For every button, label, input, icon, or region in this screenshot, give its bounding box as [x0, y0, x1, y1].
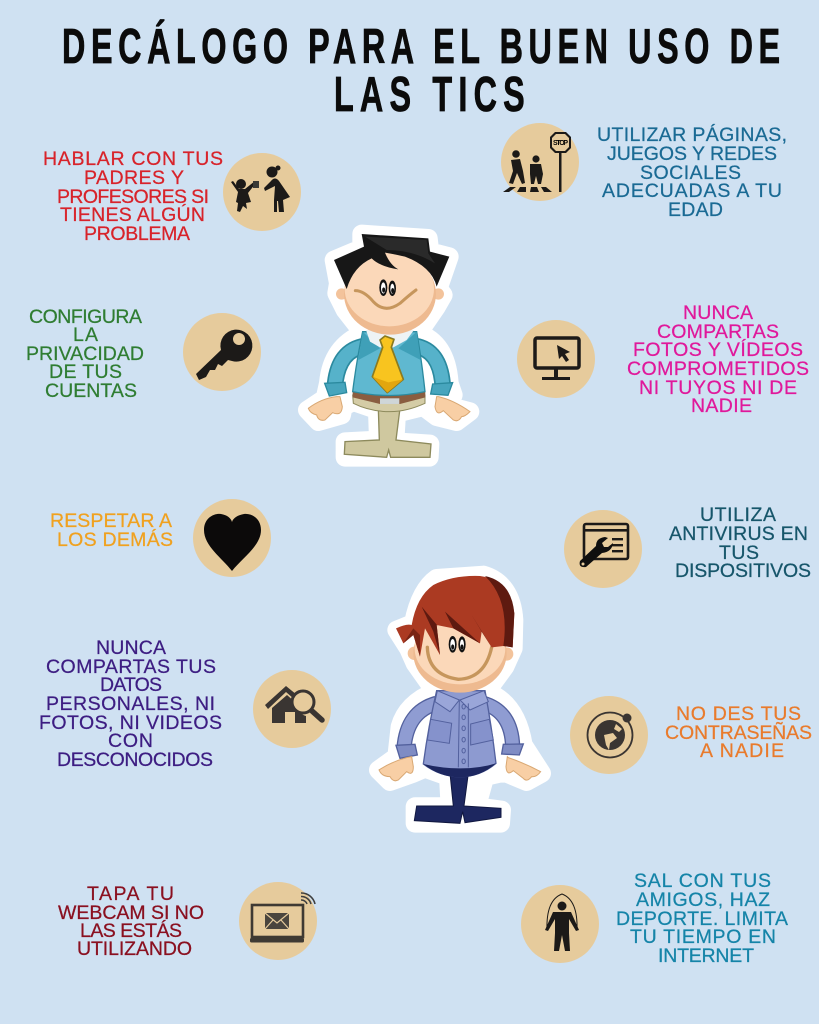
text: never share personal data: FOTOS, NI VIDEOS — [39, 712, 222, 734]
eyes — [449, 636, 457, 653]
pockets — [427, 719, 452, 743]
text: cover your webcam: WEBCAM SI NO — [58, 902, 204, 924]
tie — [372, 336, 403, 393]
smile — [427, 647, 492, 679]
text: age-appropriate sites — [597, 123, 787, 221]
text: privacy settings: CUENTAS — [45, 380, 137, 402]
legs — [414, 773, 501, 823]
icon: window and wrench — [564, 510, 642, 588]
text: do not give passwords: CONTRASEÑAS — [665, 720, 812, 744]
pants waist — [353, 395, 425, 412]
ears — [408, 647, 421, 660]
arms — [335, 346, 365, 385]
text: age-appropriate sites: JUEGOS Y REDES — [607, 143, 777, 165]
text: respect others — [50, 510, 173, 551]
character: man with tie — [307, 234, 470, 457]
eyes — [379, 279, 387, 296]
icon: laptop with mail — [239, 882, 317, 960]
icon: key — [183, 313, 261, 391]
shirt — [423, 691, 496, 777]
text: use antivirus: UTILIZA — [700, 504, 776, 526]
text: age-appropriate sites: ADECUADAS A TU — [602, 180, 782, 202]
text: never share personal data: CON — [108, 730, 153, 752]
hair — [396, 576, 514, 657]
title: LAS TICS — [334, 66, 525, 122]
text: never share compromising photos: FOTOS Y VÍDEOS — [633, 338, 803, 361]
text: age-appropriate sites: EDAD — [668, 199, 723, 221]
text: talk to parents: PROFESORES SI — [57, 186, 209, 208]
icon: monitor with cursor — [517, 320, 595, 398]
text: talk to parents: PADRES Y — [84, 167, 184, 189]
text: never share compromising photos: COMPARTAS — [657, 321, 779, 343]
text: do not give passwords: A NADIE — [700, 740, 784, 762]
title: DECÁLOGO PARA EL BUEN USO DE — [62, 18, 780, 74]
text: respect others: RESPETAR A — [50, 510, 172, 532]
text: never share compromising photos: NI TUYOS NI DE — [639, 377, 797, 399]
icon: stop sign and pedestrians — [501, 123, 579, 201]
text: never share personal data — [39, 637, 222, 771]
arms — [404, 703, 437, 748]
icon: heart — [193, 499, 271, 577]
text: talk to parents: TIENES ALGÚN — [60, 203, 205, 226]
placket — [458, 700, 468, 767]
icon: jump rope — [521, 885, 599, 963]
text: go out with friends: SAL CON TUS — [634, 870, 771, 892]
face — [344, 253, 436, 335]
text: cover your webcam: LAS ESTÁS — [80, 919, 182, 942]
text: go out with friends: INTERNET — [658, 945, 754, 967]
text: age-appropriate sites: UTILIZAR PÁGINAS, — [597, 123, 787, 146]
sticker outline — [378, 575, 542, 823]
collar — [366, 330, 414, 347]
shirt — [353, 332, 425, 395]
text: go out with friends — [616, 870, 788, 967]
text: privacy settings: DE TUS — [49, 361, 122, 383]
text: never share personal data: DATOS — [100, 674, 162, 696]
face — [413, 614, 507, 693]
hair — [334, 234, 449, 289]
sticker outline — [307, 234, 470, 457]
icon: house and magnifier — [253, 670, 331, 748]
text: go out with friends: AMIGOS, HAZ — [636, 889, 770, 911]
text: privacy settings — [26, 306, 144, 402]
icon: globe with orbit — [570, 696, 648, 774]
smile — [355, 290, 416, 308]
text: do not give passwords — [665, 703, 812, 762]
text: use antivirus — [669, 504, 811, 582]
text: go out with friends: DEPORTE. LIMITA — [616, 908, 788, 930]
character: boy with red hair — [378, 575, 542, 823]
text: never share compromising photos: NADIE — [691, 395, 752, 417]
text: age-appropriate sites: SOCIALES — [640, 162, 741, 184]
text: go out with friends: TU TIEMPO EN — [630, 926, 776, 948]
title — [62, 18, 780, 122]
text: privacy settings: CONFIGURA — [29, 306, 142, 328]
text: do not give passwords: NO DES TUS — [676, 703, 801, 725]
text: cover your webcam: TAPA TU — [87, 883, 174, 905]
text: privacy settings: LA — [73, 324, 98, 346]
collar — [435, 691, 459, 712]
text: respect others: LOS DEMÁS — [57, 528, 173, 551]
text: cover your webcam — [58, 883, 204, 960]
legs — [344, 408, 431, 457]
text: use antivirus: TUS — [719, 542, 759, 564]
ears — [336, 288, 347, 300]
icon: stop sign and pedestrians: STOP — [553, 140, 568, 147]
text: never share personal data: NUNCA — [96, 637, 166, 659]
text: privacy settings: PRIVACIDAD — [26, 343, 144, 365]
text: cover your webcam: UTILIZANDO — [77, 938, 192, 960]
text: never share personal data: DESCONOCIDOS — [57, 749, 213, 771]
text: use antivirus: ANTIVIRUS EN — [669, 523, 808, 545]
hands — [379, 757, 413, 781]
text: talk to parents — [43, 148, 223, 245]
text: never share compromising photos — [627, 302, 809, 417]
text: use antivirus: DISPOSITIVOS — [675, 560, 811, 582]
text: never share compromising photos: COMPROMETIDOS — [627, 358, 809, 380]
text: never share compromising photos: NUNCA — [683, 302, 753, 324]
text: never share personal data: PERSONALES, NI — [46, 693, 215, 715]
text: never share personal data: COMPARTAS TUS — [46, 656, 216, 678]
icon: parent and child — [223, 153, 301, 231]
text: talk to parents: HABLAR CON TUS — [43, 148, 223, 170]
text: talk to parents: PROBLEMA — [84, 223, 190, 245]
hands — [308, 397, 342, 420]
